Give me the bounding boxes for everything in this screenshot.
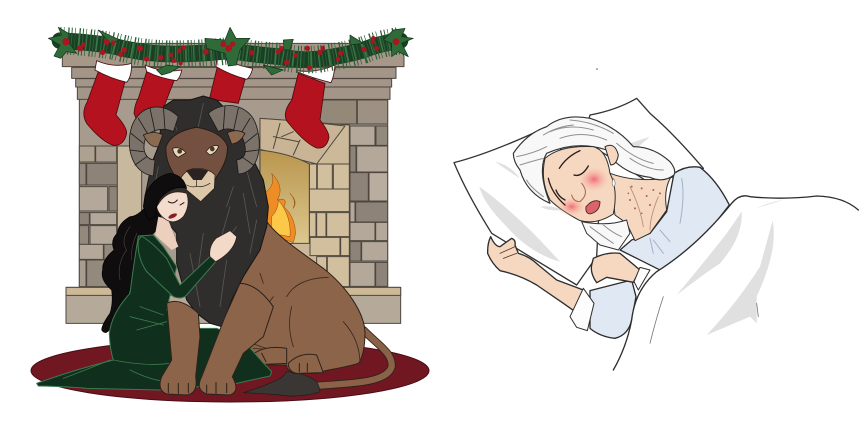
hair lower [582,220,630,250]
woman arm sleeve [138,236,216,298]
right horn [208,106,259,174]
left illustration: lion and woman by fireplace [31,27,429,402]
sleeve cuff [570,288,594,331]
stocking 3 [209,55,253,103]
woman hair top [143,173,187,220]
gown details [650,178,683,253]
finger lines [500,247,517,258]
base hearth [66,287,401,323]
back pillow [583,98,703,183]
firebox [260,150,309,243]
lion face [166,127,227,187]
lower hair strands [590,225,622,243]
paw toes [168,353,307,393]
garland [48,27,413,75]
lion mane [145,96,268,327]
nose [572,183,585,202]
lower sleeve [590,280,636,338]
neck and chest [610,173,671,241]
ear [605,145,618,165]
upper cuff [634,267,650,290]
flames [263,173,296,243]
berries [62,36,399,70]
blanket outline [613,196,858,370]
arm and left hand [488,237,589,322]
stockings [84,55,335,148]
mouth [586,201,600,214]
stone blocks [79,100,388,287]
woman hand [210,231,237,262]
tail tuft [243,372,320,396]
lion eyes [173,146,219,157]
neck tendon lines [630,187,658,230]
woman neck [155,217,178,250]
small speck [596,68,598,70]
stocking 4 [285,65,335,148]
lion ears [143,131,245,147]
haunch lines [233,273,360,363]
woman dress [37,235,272,390]
woman lips [168,212,178,220]
left horn [129,106,178,176]
blanket folds [677,200,783,335]
hair strands [517,120,663,197]
stocking 2 [134,65,182,120]
right illustration: sleeping woman [454,98,860,370]
fireplace [62,43,404,323]
face [543,146,615,222]
lion left front leg [160,301,200,395]
mantel shelves [62,43,404,99]
stocking 1 [84,61,132,145]
nightgown torso [620,167,729,272]
lion right front leg [199,283,273,395]
hair upper [513,117,675,203]
right hand [591,253,640,283]
rug [31,339,429,402]
pillow shadows [479,137,650,262]
blanket crease lines [650,297,758,343]
woman face [157,192,188,222]
hair strands [119,227,137,280]
holly leaves [48,27,413,75]
blush [556,165,611,217]
front pillow [454,129,600,285]
woman hair back [102,197,163,332]
closed eyes and brows [548,151,588,205]
rash spots [627,186,661,214]
blanket [617,196,860,370]
lion body [217,217,365,373]
stone surround [117,146,142,287]
woman features [168,200,184,205]
dress folds [63,307,170,382]
lion tail [243,330,392,396]
mid paws [254,347,323,373]
mane strands [153,103,257,307]
sweat drop [612,178,615,187]
lion muzzle [181,168,215,202]
right surround blocks [309,164,349,287]
